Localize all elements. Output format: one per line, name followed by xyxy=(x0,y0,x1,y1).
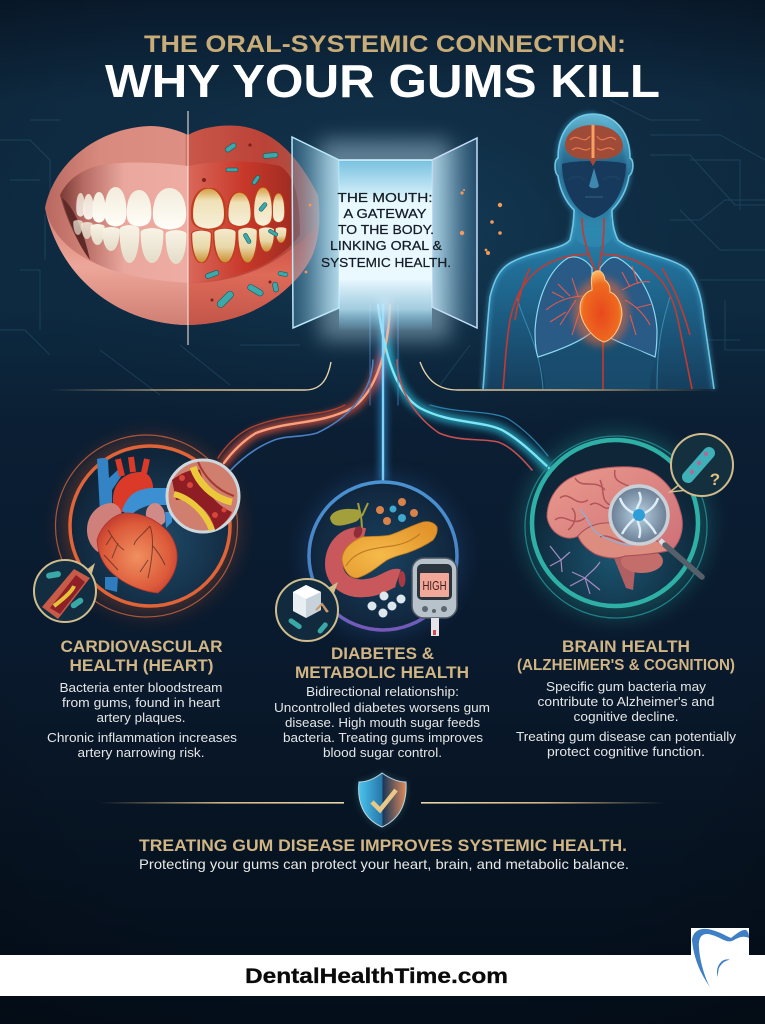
blue stream to pancreas xyxy=(382,305,384,482)
divider with shield xyxy=(100,773,665,827)
cyan stream to brain xyxy=(378,305,551,470)
healthy teeth xyxy=(76,187,186,229)
text: brain: cognitive decline. xyxy=(574,709,678,724)
gateway text: LINKING ORAL & xyxy=(330,238,442,253)
text: cardiovascular: CARDIOVASCULAR xyxy=(60,638,223,656)
icon: tooth logo xyxy=(692,929,749,987)
text: cardiovascular: artery plaques. xyxy=(96,710,186,725)
heart vessels xyxy=(105,577,118,592)
vessels xyxy=(503,218,692,389)
lips xyxy=(45,125,319,325)
gateway panel xyxy=(292,137,502,340)
energy streams from gateway xyxy=(218,300,551,482)
nutrient dots xyxy=(368,498,418,618)
inset: sugar cube xyxy=(276,579,338,641)
text: brain: protect cognitive function. xyxy=(547,744,705,759)
text: diabetes: METABOLIC HEALTH xyxy=(295,664,469,682)
lungs xyxy=(535,257,592,357)
text: diabetes: bacteria. Treating gums improves xyxy=(283,730,484,745)
inset: bacteria in vessel xyxy=(34,560,96,622)
text: cardiovascular: artery narrowing risk. xyxy=(78,745,204,760)
gold baseline connectors xyxy=(49,362,717,390)
text: brain: Treating gum disease can potentially xyxy=(516,729,737,744)
title xyxy=(105,31,660,107)
bacteria xyxy=(205,142,288,309)
pancreas xyxy=(342,522,437,578)
circle: cardiovascular xyxy=(34,435,239,622)
center pane xyxy=(339,160,432,330)
magnifier xyxy=(610,486,702,577)
text: diabetes: DIABETES & xyxy=(331,645,434,663)
text: brain xyxy=(516,638,737,759)
takeaway text: TREATING GUM DISEASE IMPROVES SYSTEMIC HEALTH. xyxy=(139,836,627,855)
footer band xyxy=(0,928,765,996)
inset: artery plaque xyxy=(167,460,239,532)
text: cardiovascular: Bacteria enter bloodstream xyxy=(60,680,222,695)
heart body xyxy=(97,513,177,593)
text: diabetes: Bidirectional relationship: xyxy=(306,684,459,699)
left atrium xyxy=(87,503,122,552)
gateway text: TO THE BODY. xyxy=(338,222,434,237)
diseased teeth xyxy=(192,187,285,229)
website url: DentalHealthTime.com xyxy=(245,965,508,988)
brain stem xyxy=(612,553,636,590)
heart xyxy=(573,278,629,346)
takeaway text xyxy=(139,836,629,872)
title: THE ORAL-SYSTEMIC CONNECTION: xyxy=(144,31,626,58)
glucose meter xyxy=(412,558,457,636)
text: diabetes: blood sugar control. xyxy=(323,745,442,760)
gateway text: THE MOUTH: xyxy=(338,190,432,205)
purple nerves xyxy=(550,546,600,594)
circle: brain xyxy=(522,431,733,619)
text: brain: Specific gum bacteria may xyxy=(546,679,707,694)
silhouette xyxy=(483,114,714,389)
right wing xyxy=(432,138,477,328)
icon: shield check xyxy=(359,773,406,827)
left wing xyxy=(292,137,339,328)
illustration: human body xyxy=(483,114,714,389)
red stream to heart xyxy=(224,305,390,463)
brain shape xyxy=(547,467,682,558)
cerebellum xyxy=(621,549,663,573)
brain xyxy=(565,125,623,166)
text: brain: contribute to Alzheimer's and xyxy=(538,694,714,709)
face xyxy=(562,161,626,218)
aorta xyxy=(113,457,153,512)
text: brain: BRAIN HEALTH xyxy=(562,638,690,656)
gateway text xyxy=(321,190,451,270)
arm and torso lines xyxy=(517,297,670,389)
text: cardiovascular: from gums, found in heart xyxy=(62,695,220,710)
text: diabetes: disease. High mouth sugar feeds xyxy=(285,715,481,730)
gallbladder xyxy=(330,509,361,526)
takeaway text: Protecting your gums can protect your heart, brain, and metabolic balance. xyxy=(139,856,629,872)
circle: diabetes xyxy=(276,476,463,641)
gums xyxy=(60,163,188,283)
text: cardiovascular: Chronic inflammation increases xyxy=(47,730,238,745)
text: diabetes xyxy=(274,645,490,760)
question bubble: ? xyxy=(710,470,720,489)
duodenum xyxy=(334,536,398,588)
title: WHY YOUR GUMS KILL xyxy=(105,55,660,107)
text: brain: (ALZHEIMER'S & COGNITION) xyxy=(517,657,735,674)
gateway text: SYSTEMIC HEALTH. xyxy=(321,255,451,270)
text: diabetes: Uncontrolled diabetes worsens gum xyxy=(274,700,490,715)
meter reading: HIGH xyxy=(422,578,446,593)
question bubble xyxy=(670,434,733,496)
text: cardiovascular: HEALTH (HEART) xyxy=(70,657,214,675)
illustration: mouth healthy vs diseased xyxy=(45,111,319,345)
gateway text: A GATEWAY xyxy=(344,206,427,221)
text: cardiovascular xyxy=(47,638,238,760)
